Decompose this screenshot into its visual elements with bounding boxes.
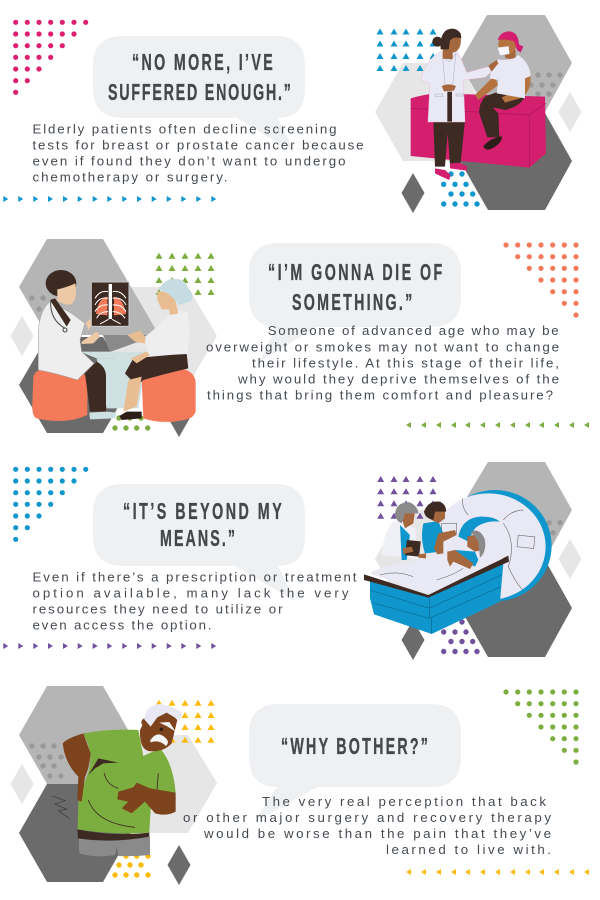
blue dot triangle: [16, 469, 86, 539]
green triangle grid: [156, 253, 214, 295]
purple dot cluster: [444, 622, 477, 652]
heading 1: SUFFERED ENOUGH.”: [108, 81, 291, 106]
body text 3: even access the option.: [32, 618, 212, 632]
body text 3: resources they need to utilize or: [32, 602, 283, 616]
hexagon backdrop 2: [10, 239, 217, 437]
body text 1: Elderly patients often decline screening: [32, 122, 336, 136]
body text 2: overweight or smokes may not want to change: [206, 340, 559, 355]
panel: no more, I've suffered enough: [3, 15, 582, 213]
body text 4: The very real perception that back: [262, 794, 546, 809]
blue triangle grid: [376, 28, 436, 71]
hexagon backdrop 4: [10, 686, 217, 885]
body text 2: things that bring them comfort and pleasure?: [207, 388, 553, 403]
illustration: patient in MRI scanner with staff: [364, 490, 552, 634]
speech bubble 4: [249, 704, 461, 821]
body text 4: or other major surgery and recovery therapy: [183, 810, 551, 825]
yellow triangle grid: [156, 700, 214, 743]
green dot triangle: [506, 692, 576, 762]
heading 2: “I’M GONNA DIE OF: [268, 261, 442, 286]
heading 3: MEANS.”: [160, 527, 235, 552]
green dot cluster: [115, 418, 148, 428]
heading 3: [123, 500, 282, 552]
panel: I'm gonna die of something: [10, 239, 589, 437]
pink dot triangle: [16, 22, 86, 92]
green arrow row: [406, 422, 589, 428]
heading 2: SOMETHING.”: [292, 291, 412, 316]
speech bubble 2: [249, 243, 461, 362]
body text 4: learned to live with.: [386, 842, 551, 857]
yellow dot cluster: [115, 856, 148, 875]
body text 2: why would they deprive themselves of the: [237, 372, 559, 387]
body text 3: option available, many lack the very: [32, 586, 349, 600]
illustration: doctor showing x-ray to patient: [32, 270, 196, 422]
hexagon backdrop 1: [375, 15, 582, 213]
body text 1: chemotherapy or surgery.: [32, 170, 227, 184]
heading 2: [268, 261, 442, 316]
illustration: doctor comforting patient on a bench: [411, 29, 546, 180]
body text 1: [32, 122, 364, 184]
blue arrow row: [3, 196, 216, 202]
body text 4: would be worse than the pain that they’ve: [203, 826, 551, 841]
purple triangle grid: [377, 476, 436, 519]
heading 1: “NO MORE, I’VE: [132, 51, 273, 76]
body text 2: their lifestyle. At this stage of their life,: [252, 356, 559, 371]
orange dot triangle: [506, 245, 576, 315]
purple arrow row: [3, 643, 216, 649]
speech bubble 1: [93, 36, 305, 153]
panel: it's beyond my means: [3, 462, 582, 660]
blue dot cluster: [444, 174, 477, 204]
heading 1: [108, 51, 291, 106]
panel: why bother: [10, 686, 589, 885]
body text 2: Someone of advanced age who may be: [268, 323, 559, 338]
body text 3: [32, 570, 357, 632]
yellow arrow row: [406, 869, 589, 875]
hexagon backdrop 3: [375, 462, 582, 660]
heading 3: “IT’S BEYOND MY: [123, 500, 282, 525]
heading 4: “WHY BOTHER?”: [281, 735, 428, 760]
body text 1: tests for breast or prostate cancer because: [32, 138, 364, 152]
speech bubble 3: [93, 484, 305, 601]
illustration: man holding his back in pain: [53, 704, 183, 856]
body text 3: Even if there’s a prescription or treatment: [32, 570, 357, 584]
body text 2: [206, 323, 559, 403]
body text 4: [183, 794, 551, 857]
body text 1: even if found they don’t want to undergo: [32, 154, 346, 168]
